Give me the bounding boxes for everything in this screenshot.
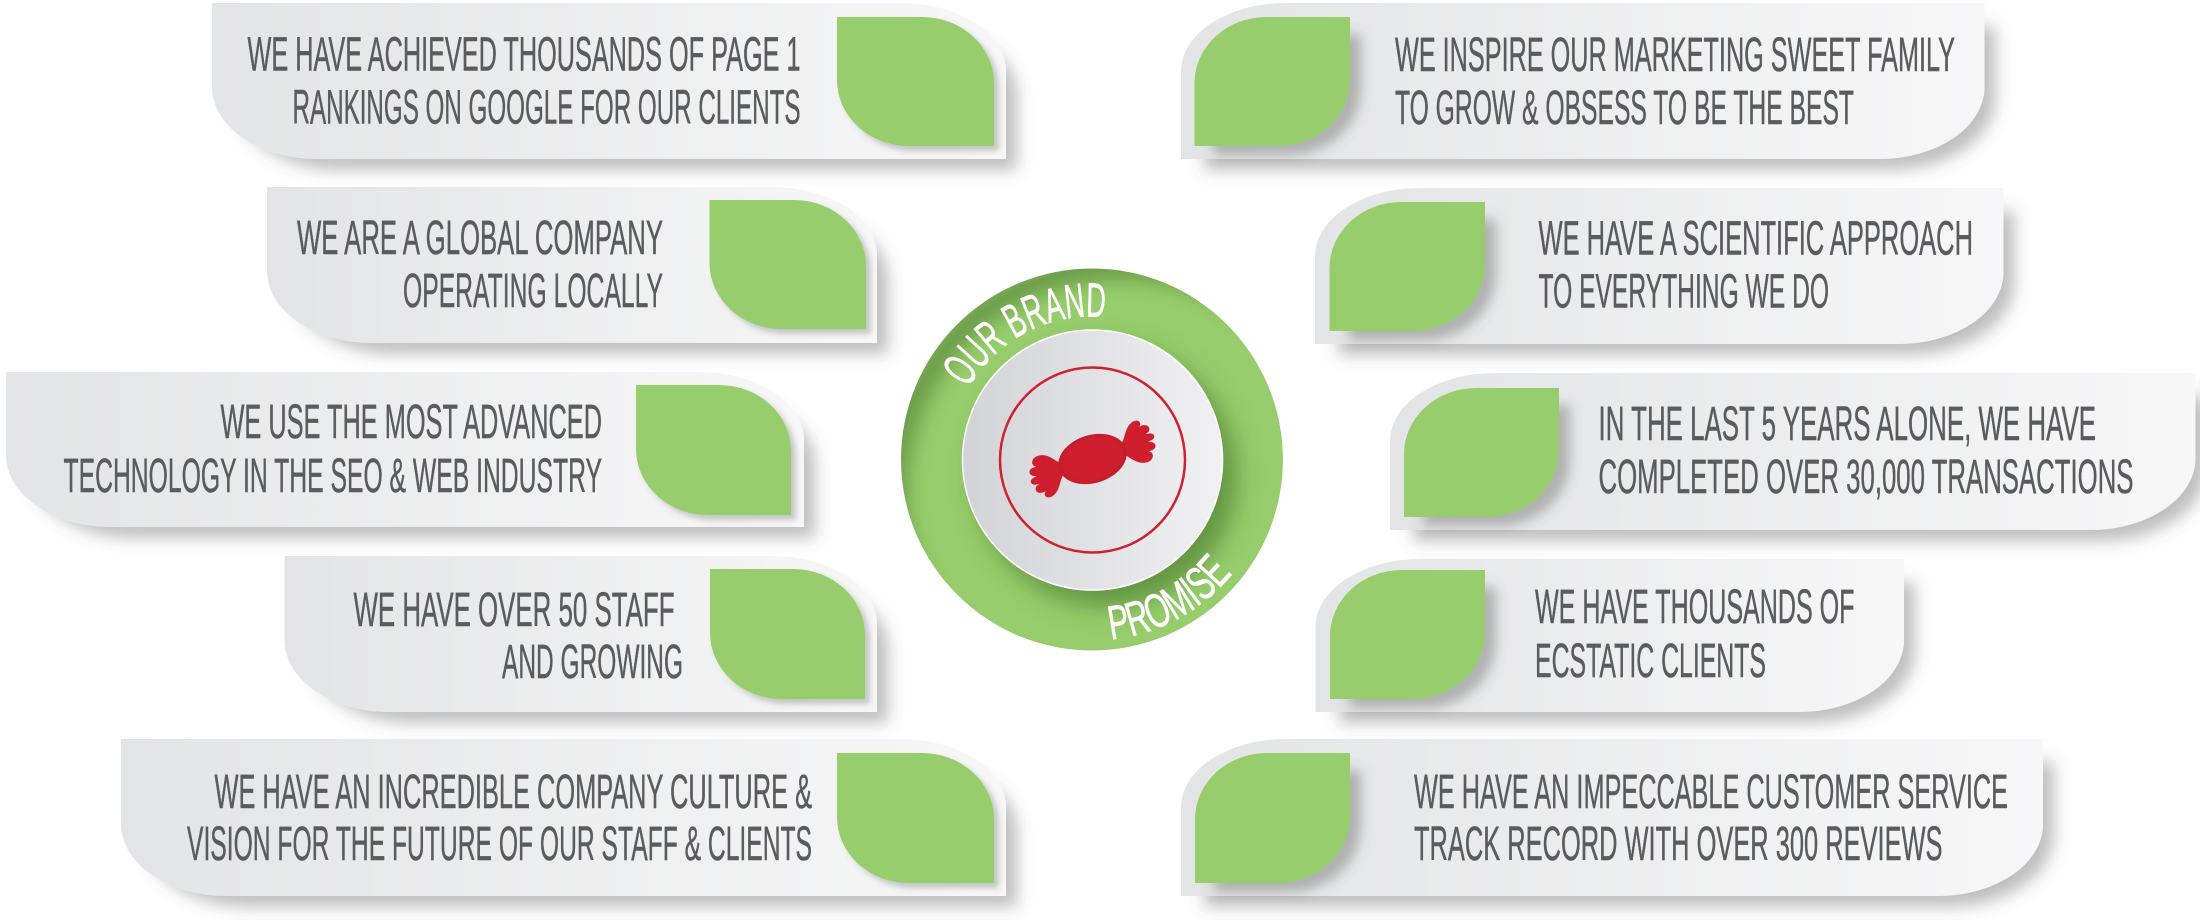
text: ecstatic: WE HAVE THOUSANDS OF — [1535, 581, 1854, 634]
text: scientific: TO EVERYTHING WE DO — [1538, 266, 1829, 318]
text: global company: WE ARE A GLOBAL COMPANY — [297, 212, 663, 265]
panel: advanced technology — [6, 372, 804, 527]
icon: green leaf — [1195, 753, 1350, 883]
panel: global company — [267, 187, 877, 343]
panel: ecstatic clients — [1316, 559, 1904, 712]
text: staff — [354, 584, 683, 689]
text: global company — [297, 212, 663, 318]
icon: green leaf — [1404, 388, 1559, 517]
panel: company culture — [121, 739, 1006, 896]
text: technology — [64, 396, 602, 503]
icon: green leaf — [837, 753, 994, 883]
text: staff: WE HAVE OVER 50 STAFF — [354, 584, 674, 637]
green ring — [901, 268, 1283, 650]
panel: 30,000 transactions — [1390, 373, 2196, 530]
text: culture: WE HAVE AN INCREDIBLE COMPANY CULTURE & — [214, 766, 812, 819]
icon: green leaf — [1194, 17, 1350, 146]
text: culture — [187, 766, 812, 871]
panel: thousands of page 1 rankings — [212, 3, 1006, 159]
icon: green leaf — [837, 17, 994, 146]
text: culture: VISION FOR THE FUTURE OF OUR STAFF & CLIENTS — [187, 818, 812, 871]
text: scientific — [1538, 212, 1973, 318]
curved label: our brand: OUR BRAND — [944, 283, 1105, 383]
text: inspire — [1395, 29, 1955, 135]
icon: green leaf — [1330, 570, 1485, 699]
text: ecstatic: ECSTATIC CLIENTS — [1535, 635, 1766, 688]
icon: green leaf — [710, 569, 865, 699]
curved label: promise: PROMISE — [1108, 552, 1232, 640]
text: technology: WE USE THE MOST ADVANCED — [220, 396, 602, 449]
icon: green leaf — [636, 385, 791, 515]
text: rankings — [248, 28, 800, 134]
text: rankings: WE HAVE ACHIEVED THOUSANDS OF PAGE 1 — [248, 28, 800, 82]
central badge: our brand promise — [901, 268, 1283, 650]
text: rankings: RANKINGS ON GOOGLE FOR OUR CLIENTS — [292, 82, 800, 134]
panel: over 50 staff — [284, 556, 877, 712]
icon: green leaf — [710, 200, 866, 329]
text: transactions — [1598, 398, 2134, 504]
icon: green leaf — [1330, 202, 1485, 331]
panel: customer service — [1181, 739, 2043, 896]
panel: inspire marketing sweet family — [1181, 3, 1984, 159]
text: staff: AND GROWING — [502, 636, 683, 689]
inner plate — [962, 330, 1222, 590]
text: ecstatic — [1535, 581, 1854, 688]
text: customer service — [1414, 766, 2008, 871]
red ring — [1000, 368, 1185, 552]
text: technology: TECHNOLOGY IN THE SEO & WEB INDUSTRY — [64, 450, 602, 503]
panel: scientific approach — [1315, 188, 2004, 344]
text: global company: OPERATING LOCALLY — [403, 265, 663, 318]
icon: candy — [1023, 417, 1162, 501]
